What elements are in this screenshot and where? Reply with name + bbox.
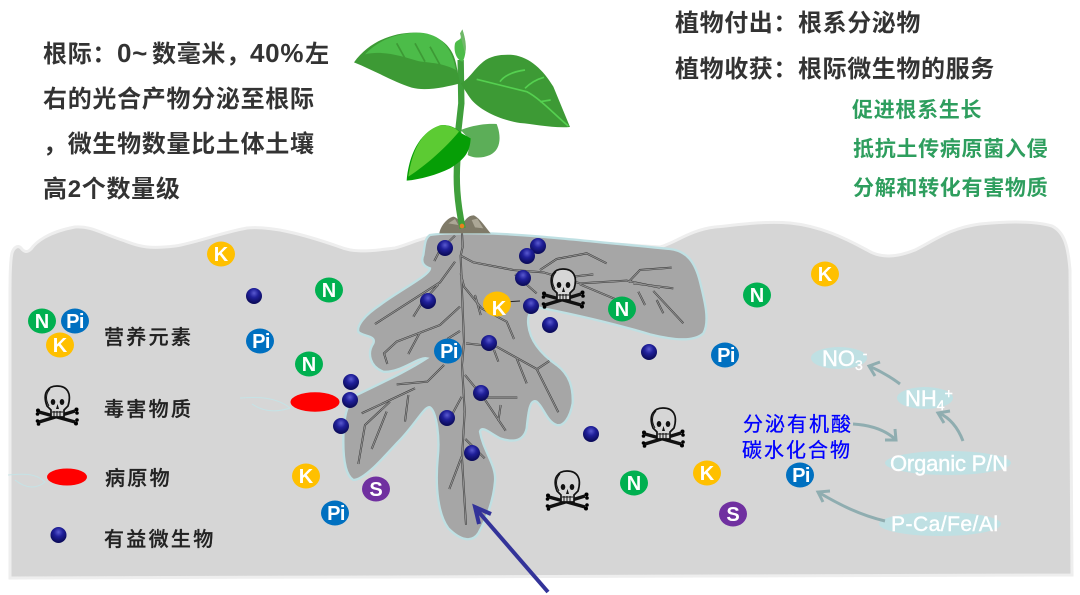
nutrient K: K [492,298,507,320]
nutrient Pi: Pi [440,341,458,363]
nutrient Pi [246,328,814,526]
legend: nutrient icons: K [53,335,68,357]
nutrient Pi: Pi [327,503,345,525]
nutrient K: K [700,463,715,485]
rhizosphere root zone [343,233,707,539]
nutrient S: S [369,479,383,501]
exudate label [742,413,853,462]
left description text: 数毫米， [152,41,251,68]
beneficial microbes [246,238,657,461]
left description text [43,38,330,203]
nutrient N: N [322,280,336,302]
pathogen [240,392,340,412]
nutrient K: K [818,264,833,286]
back leaf [461,124,500,158]
plant give and receive text: 植物付出：根系分泌物 [675,10,921,37]
P-Ca/Fe/Al node: P-Ca/Fe/Al [891,513,998,536]
legend [8,308,216,551]
plant seedling [354,29,570,233]
soil clump [439,215,491,233]
arrow to rhizosphere [475,507,548,592]
nutrient S: S [726,504,740,526]
left description text: 0~ [117,38,148,68]
stem [457,60,463,228]
NH4 node [897,385,953,413]
nutrient K [207,242,839,488]
nutrient Pi: Pi [792,465,810,487]
nutrient transformation cycle [742,345,1011,536]
NH4 node: 4 [937,397,945,413]
microbial services list: 抵抗土传病原菌入侵 [853,137,1048,161]
legend: microbe icon [50,527,66,543]
left description text: 40% [250,38,304,68]
Organic P/N node: Organic P/N [890,451,1008,476]
NH4 node: + [945,385,953,401]
plant give and receive text: 植物收获：根际微生物的服务 [675,56,995,83]
NO3 node: 3 [855,357,863,373]
nutrient N [295,278,771,496]
nutrient Pi: Pi [717,345,735,367]
microbial services list: 分解和转化有害物质 [853,177,1048,200]
NH4 node: NH [905,386,937,411]
nutrient K: K [299,466,314,488]
skull icons [542,269,685,511]
microbial services list: 促进根系生长 [852,99,982,122]
cycle arrows [818,362,963,521]
nutrient N: N [302,354,316,376]
soil panel [10,222,1072,578]
plant give and receive text [675,10,995,83]
nutrient N: N [627,473,641,495]
left description text: 根际： [43,41,117,68]
middle leaf [407,125,471,181]
legend: nutrient icons [28,308,89,358]
nutrient K: K [214,244,229,266]
bud [455,29,466,62]
microbial services list [852,99,1048,200]
sprout node [460,224,464,228]
left description text: 高2个数量级 [43,176,181,203]
NO3 node: - [863,345,868,361]
nutrient S [362,476,747,526]
legend: microbe label: 有益微生物 [104,528,216,551]
left description text: 右的光合产物分泌至根际 [43,86,315,113]
legend: toxin label: 毒害物质 [104,398,193,421]
NO3 node [811,345,868,373]
right leaf [461,55,570,127]
legend: pathogen label: 病原物 [105,467,172,490]
left description text: 左 [305,41,330,68]
legend: toxin icon [36,386,79,426]
legend: pathogen icon [8,468,87,487]
left description text: ，微生物数量比土体土壤 [43,130,315,158]
NO3 node: NO [822,346,855,371]
legend: nutrient icons: N [35,311,49,333]
nutrient Pi: Pi [252,331,270,353]
legend: nutrient icons: Pi [66,311,84,333]
legend: nutrient label: 营养元素 [104,326,193,349]
exudate label: 分泌有机酸 [743,413,853,436]
nutrient N: N [615,299,629,321]
exudate label: 碳水化合物 [742,439,852,462]
nutrient N: N [750,285,764,307]
left leaf [354,33,460,89]
